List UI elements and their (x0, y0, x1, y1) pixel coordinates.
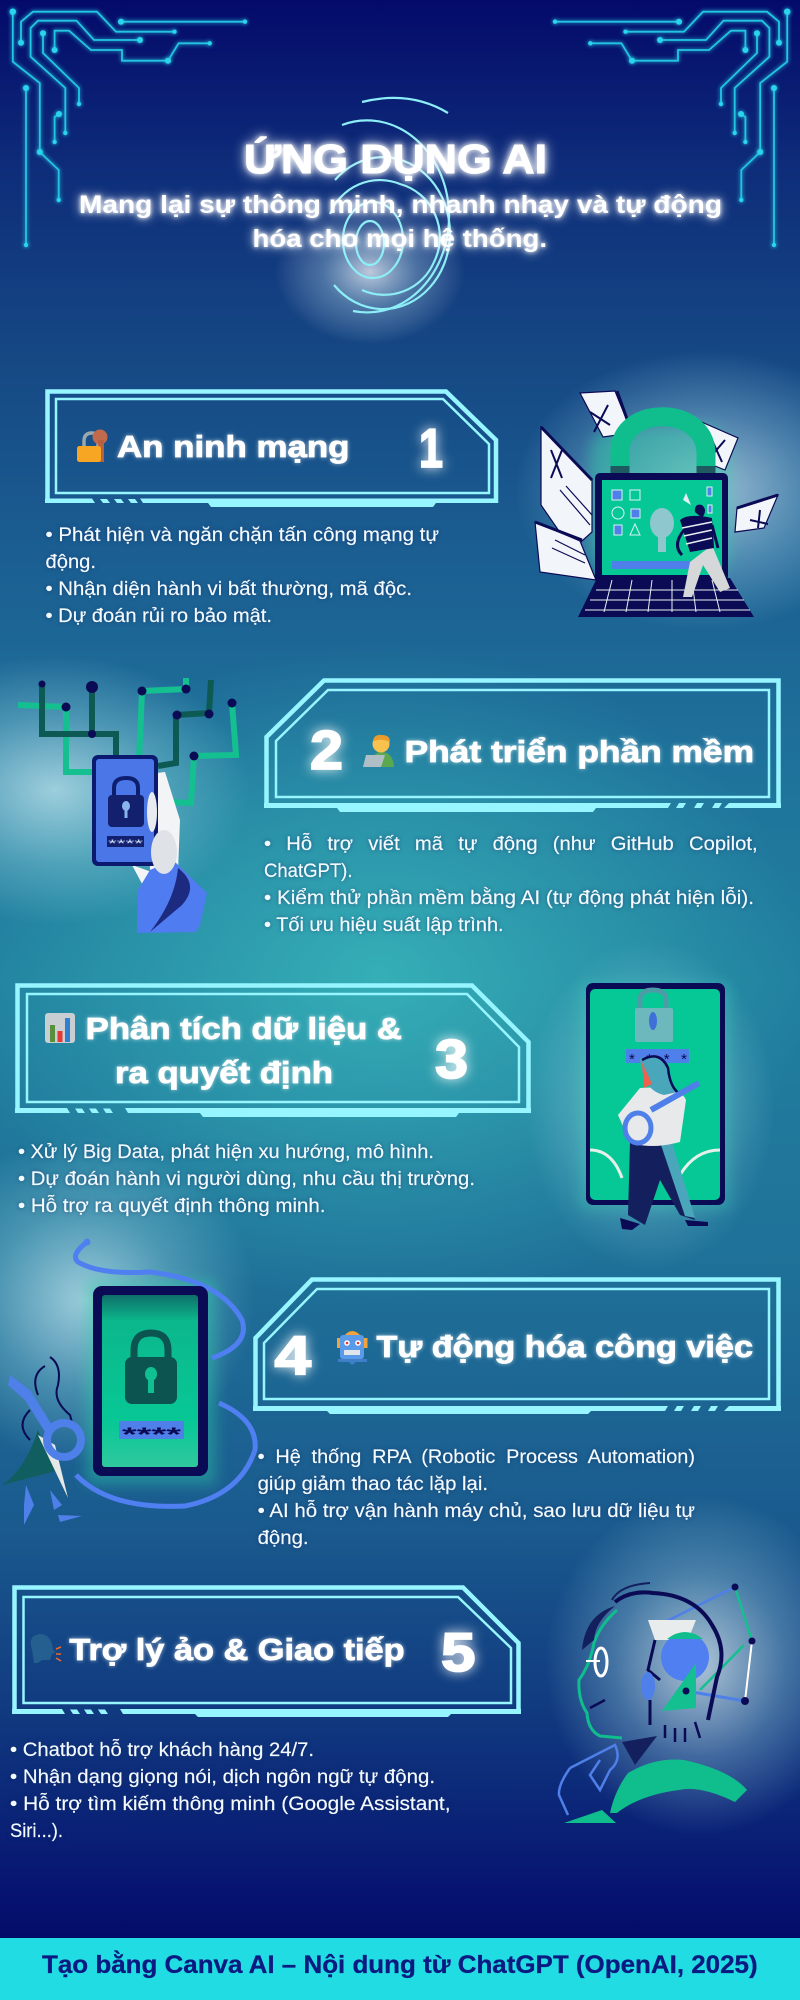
text block: section 2 (264, 833, 758, 936)
shackle (620, 417, 706, 480)
number 5: 5 (441, 1621, 476, 1683)
text block: section 4: động. (258, 1528, 309, 1549)
text block: section 2: ChatGPT). (264, 861, 352, 882)
circuit decoration: top right (553, 8, 790, 247)
text block: section 4: • AI hỗ trợ vận hành máy chủ, sao lưu dữ liệu tự (258, 1500, 695, 1522)
illustration: phone with circuit lines: **** (108, 838, 144, 850)
text block: section 5: • Chatbot hỗ trợ khách hàng 24/7. (10, 1739, 314, 1761)
panel: section 1 (45, 392, 498, 507)
heading: Trợ lý ảo & Giao tiếp (69, 1632, 405, 1667)
panel: section 3: ra quyết định (115, 1055, 333, 1090)
text block: section 1: • Dự đoán rủi ro bảo mật. (46, 606, 272, 627)
illustration: head with network (559, 1583, 756, 1823)
illustration: phone with woman and key (580, 983, 730, 1230)
laptop base (578, 578, 754, 617)
illustration: phone with circuit lines (18, 678, 236, 933)
icon: speaking head (31, 1634, 61, 1663)
number 4: 4 (274, 1324, 311, 1386)
hand and sleeve (148, 772, 180, 872)
icon: lock with key (77, 430, 108, 462)
text block: section 3: • Hỗ trợ ra quyết định thông minh. (18, 1195, 326, 1217)
heading: Phát triển phần mềm (405, 734, 754, 769)
text block: section 4: giúp giảm thao tác lặp lại. (258, 1474, 488, 1495)
panel: section 3 (15, 986, 531, 1117)
number 1: 1 (419, 417, 443, 479)
subtitle: hóa cho mọi hệ thống. (252, 225, 547, 253)
footer bar (0, 1938, 800, 2000)
number 2: 2 (310, 719, 343, 781)
panel: section 5 (12, 1588, 521, 1717)
text block: section 2: • Kiểm thử phần mềm bằng AI (tự động phát hiện lỗi). (264, 887, 754, 909)
fingerprint graphic (275, 98, 465, 344)
illustration: laptop with padlock (535, 391, 778, 617)
icon: robot (337, 1331, 368, 1365)
text block: section 5: • Nhận dạng giọng nói, dịch ngôn ngữ tự động. (10, 1767, 435, 1788)
text block: section 1 (46, 525, 439, 627)
illustration: green phone with lock and figure (2, 1238, 255, 1525)
text block: section 1: • Phát hiện và ngăn chặn tấn công mạng tự (46, 525, 439, 546)
text block: section 1: • Nhận diện hành vi bất thường, mã độc. (46, 579, 412, 600)
text block: section 5 (10, 1739, 450, 1842)
subtitle (79, 191, 722, 253)
heading: An ninh mạng (117, 429, 350, 464)
text block: section 1: động. (46, 552, 96, 573)
panel: section 4 (253, 1280, 781, 1414)
text block: section 3: • Xử lý Big Data, phát hiện xu hướng, mô hình. (18, 1142, 434, 1163)
text block: section 2: • Tối ưu hiệu suất lập trình. (264, 915, 504, 936)
text block: section 2: • Hỗ trợ viết mã tự động (như GitHub Copilot, (264, 833, 758, 855)
papers (535, 391, 778, 580)
text block: section 5: Siri...). (10, 1821, 63, 1842)
icon: developer with laptop (363, 735, 394, 767)
text block: section 4: • Hệ thống RPA (Robotic Process Automation) (258, 1447, 695, 1468)
screen icons (612, 487, 712, 535)
title: ỨNG DỤNG AI (244, 136, 547, 182)
laptop screen (595, 473, 728, 581)
phone (92, 755, 158, 866)
woman (628, 1140, 695, 1225)
person (683, 545, 730, 597)
heading: Tự động hóa công việc (376, 1329, 753, 1364)
illustration: green phone with lock and figure: **** (122, 1425, 182, 1446)
subtitle: Mang lại sự thông minh, nhanh nhạy và tự động (79, 191, 722, 219)
text block: section 4 (258, 1447, 695, 1549)
small figure with key (2, 1430, 68, 1500)
circuit decoration: top left (10, 8, 247, 247)
footer text: Tạo bằng Canva AI – Nội dung từ ChatGPT (OpenAI, 2025) (42, 1949, 758, 1979)
number 3: 3 (435, 1028, 468, 1090)
icon: bar chart (45, 1013, 75, 1043)
heading: Phân tích dữ liệu & (86, 1011, 402, 1046)
text block: section 3: • Dự đoán hành vi người dùng, nhu cầu thị trường. (18, 1169, 475, 1190)
text block: section 3 (18, 1142, 475, 1217)
illustration: phone with woman and key: * * * * (629, 1051, 687, 1068)
text block: section 5: • Hỗ trợ tìm kiếm thông minh (Google Assistant, (10, 1793, 450, 1815)
panel: section 2 (264, 680, 781, 812)
